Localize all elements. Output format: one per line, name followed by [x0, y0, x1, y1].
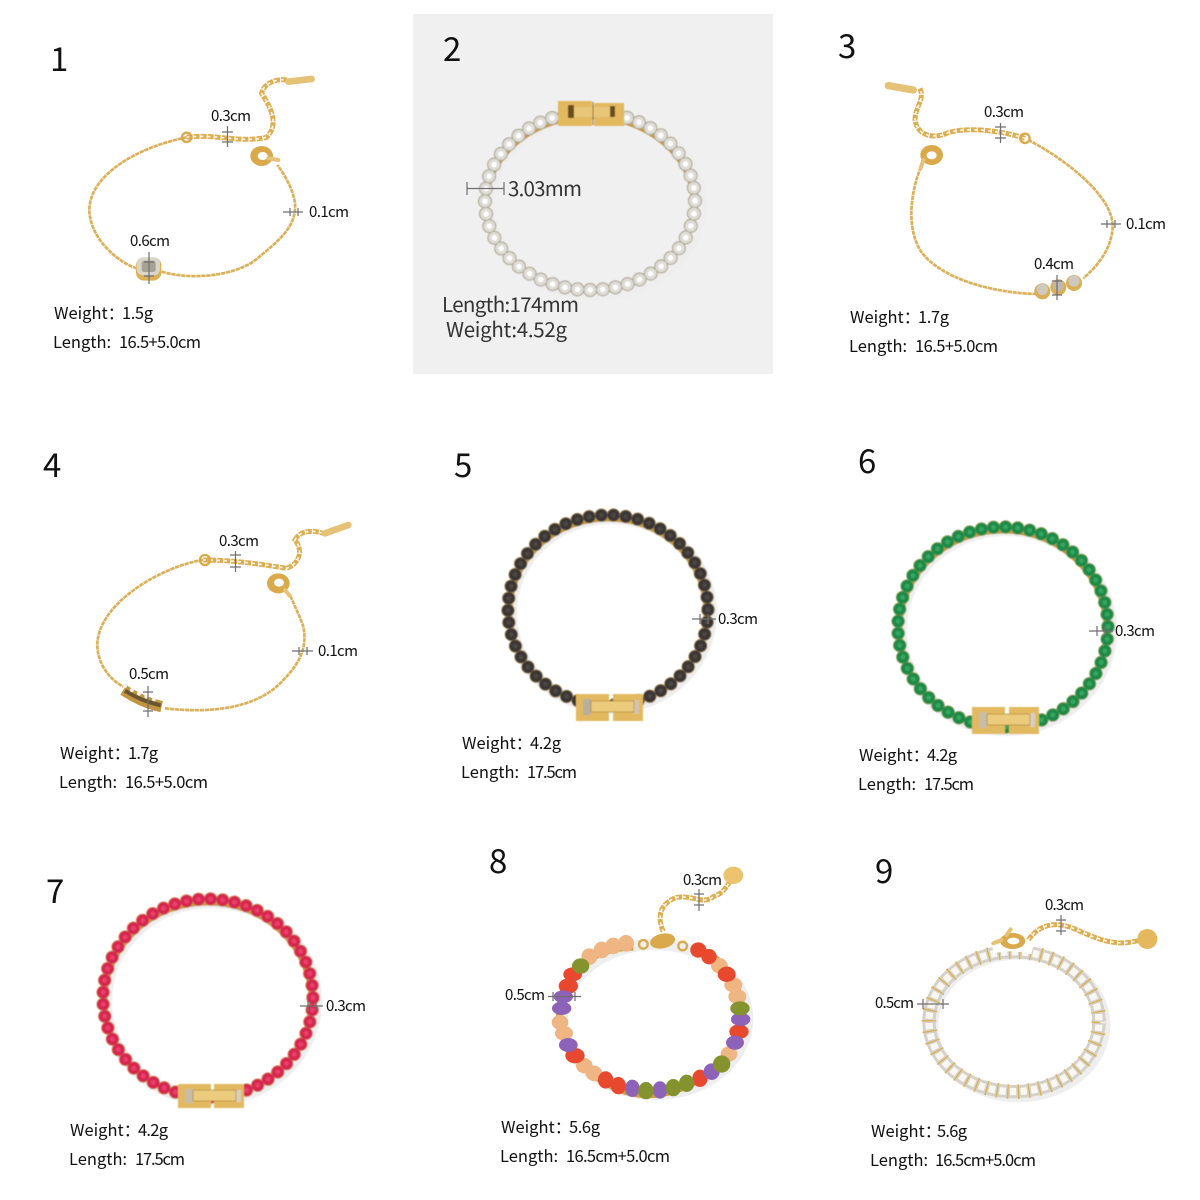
spec text: Weight：: [850, 304, 920, 328]
spec text: [59, 740, 208, 793]
grey background: [413, 14, 773, 374]
measure mark: [300, 1001, 323, 1011]
size labels: [875, 894, 1084, 1013]
spec text: 17.5cm: [924, 771, 974, 795]
number 3: 3: [838, 20, 856, 68]
number 9: 9: [875, 845, 893, 893]
number 4: 4: [43, 439, 61, 487]
spec text: 4.2g: [927, 742, 958, 766]
spec text: Length:: [500, 1143, 558, 1167]
measure mark: [1089, 626, 1113, 636]
panel: bracelet 8: [489, 835, 749, 1167]
size label: 0.3cm: [718, 608, 758, 629]
measure marks: [548, 889, 704, 1001]
panel: bracelet 2: [413, 14, 773, 374]
spec text: 5.6g: [937, 1118, 968, 1142]
spec text: 1.7g: [918, 304, 950, 328]
spec text: 17.5cm: [135, 1146, 185, 1170]
labels: 3.03mm: [508, 172, 582, 202]
size label: 0.3cm: [1115, 620, 1155, 641]
bracelet 8 multicolour stones with disc extender: [553, 867, 749, 1098]
number 6: 6: [858, 435, 876, 483]
size labels: 0.6cm: [130, 230, 170, 251]
size labels: [129, 530, 358, 684]
labels: Length:174mm: [442, 288, 579, 318]
spec text: [858, 742, 974, 795]
measure marks: [917, 915, 1066, 1009]
spec text: 1.7g: [128, 740, 159, 764]
measure mark: [467, 182, 504, 195]
spec text: Length:: [870, 1147, 928, 1171]
size labels: 0.4cm: [1034, 253, 1074, 274]
spec text: 16.5cm+5.0cm: [935, 1147, 1036, 1171]
spec text: 16.5+5.0cm: [119, 329, 201, 353]
size labels: 0.5cm: [129, 663, 169, 684]
size labels: [130, 105, 349, 251]
spec text: [69, 1117, 185, 1170]
bracelet 3 fine chain with three hearts: [888, 86, 1113, 299]
size labels: 0.3cm: [984, 101, 1024, 122]
spec text: Weight：: [54, 300, 124, 324]
labels: Weight:4.52g: [446, 313, 567, 343]
bracelet 4 fine chain with curved bar: [97, 525, 348, 710]
spec text: 17.5cm: [527, 759, 577, 783]
panel: bracelet 3: [838, 20, 1166, 357]
measure mark: [692, 614, 716, 624]
spec text: Length:: [858, 771, 916, 795]
spec text: Length:: [53, 329, 111, 353]
spec text: Weight：: [859, 742, 929, 766]
bracelet 6 green tennis chain: [898, 527, 1111, 734]
measure marks: [995, 123, 1121, 300]
number 5: 5: [454, 439, 472, 487]
measure marks: [143, 551, 313, 717]
spec text: Length:: [849, 333, 907, 357]
panel: bracelet 4: [43, 439, 358, 793]
spec text: [500, 1114, 670, 1167]
spec text: Weight：: [871, 1118, 941, 1142]
number 2: 2: [443, 23, 461, 71]
spec text: Weight：: [462, 730, 532, 754]
bracelet 5 black tennis chain: [508, 515, 711, 721]
spec text: 5.6g: [569, 1114, 601, 1138]
number 8: 8: [489, 835, 507, 883]
spec text: 16.5+5.0cm: [125, 769, 208, 793]
size labels: 0.3cm: [683, 869, 722, 890]
spec text: 16.5+5.0cm: [915, 333, 998, 357]
bracelet 9 clear baguette chain with disc extender: [929, 925, 1157, 1096]
measure marks: [144, 126, 303, 284]
size labels: 0.5cm: [505, 984, 545, 1005]
spec text: 16.5cm+5.0cm: [566, 1143, 670, 1167]
panel: bracelet 5: [454, 439, 758, 783]
panel: bracelet 7: [46, 865, 366, 1170]
panel: bracelet 9: [870, 845, 1157, 1171]
size labels: 0.5cm: [875, 992, 914, 1013]
size labels: 0.1cm: [1126, 213, 1166, 234]
spec text: [849, 304, 998, 357]
spec text: 1.5g: [122, 300, 154, 324]
spec text: 4.2g: [530, 730, 562, 754]
spec text: 4.2g: [138, 1117, 169, 1141]
size labels: [505, 869, 722, 1005]
panel: bracelet 6: [858, 435, 1155, 795]
spec text: Length:: [69, 1146, 127, 1170]
size labels: [984, 101, 1166, 274]
bracelet 2 clear tennis chain: [485, 101, 701, 295]
spec text: Length:: [59, 769, 117, 793]
size labels: 0.3cm: [1045, 894, 1084, 915]
spec text: [53, 300, 201, 353]
size labels: 0.1cm: [318, 640, 358, 661]
labels: [442, 172, 582, 343]
spec text: Weight：: [60, 740, 130, 764]
size label: 0.3cm: [326, 995, 366, 1016]
spec text: [461, 730, 577, 783]
panel: bracelet 1: [50, 33, 349, 353]
size labels: 0.3cm: [219, 530, 259, 551]
spec text: Weight：: [501, 1114, 571, 1138]
spec text: Weight：: [70, 1117, 140, 1141]
number 1: 1: [50, 33, 68, 81]
size labels: 0.1cm: [309, 201, 349, 222]
bracelet 7 red tennis chain: [103, 899, 316, 1108]
size labels: 0.3cm: [211, 105, 251, 126]
number 7: 7: [46, 865, 64, 913]
spec text: [870, 1118, 1036, 1171]
bracelet 1 fine chain with pavé charm: [89, 79, 312, 281]
spec text: Length:: [461, 759, 519, 783]
